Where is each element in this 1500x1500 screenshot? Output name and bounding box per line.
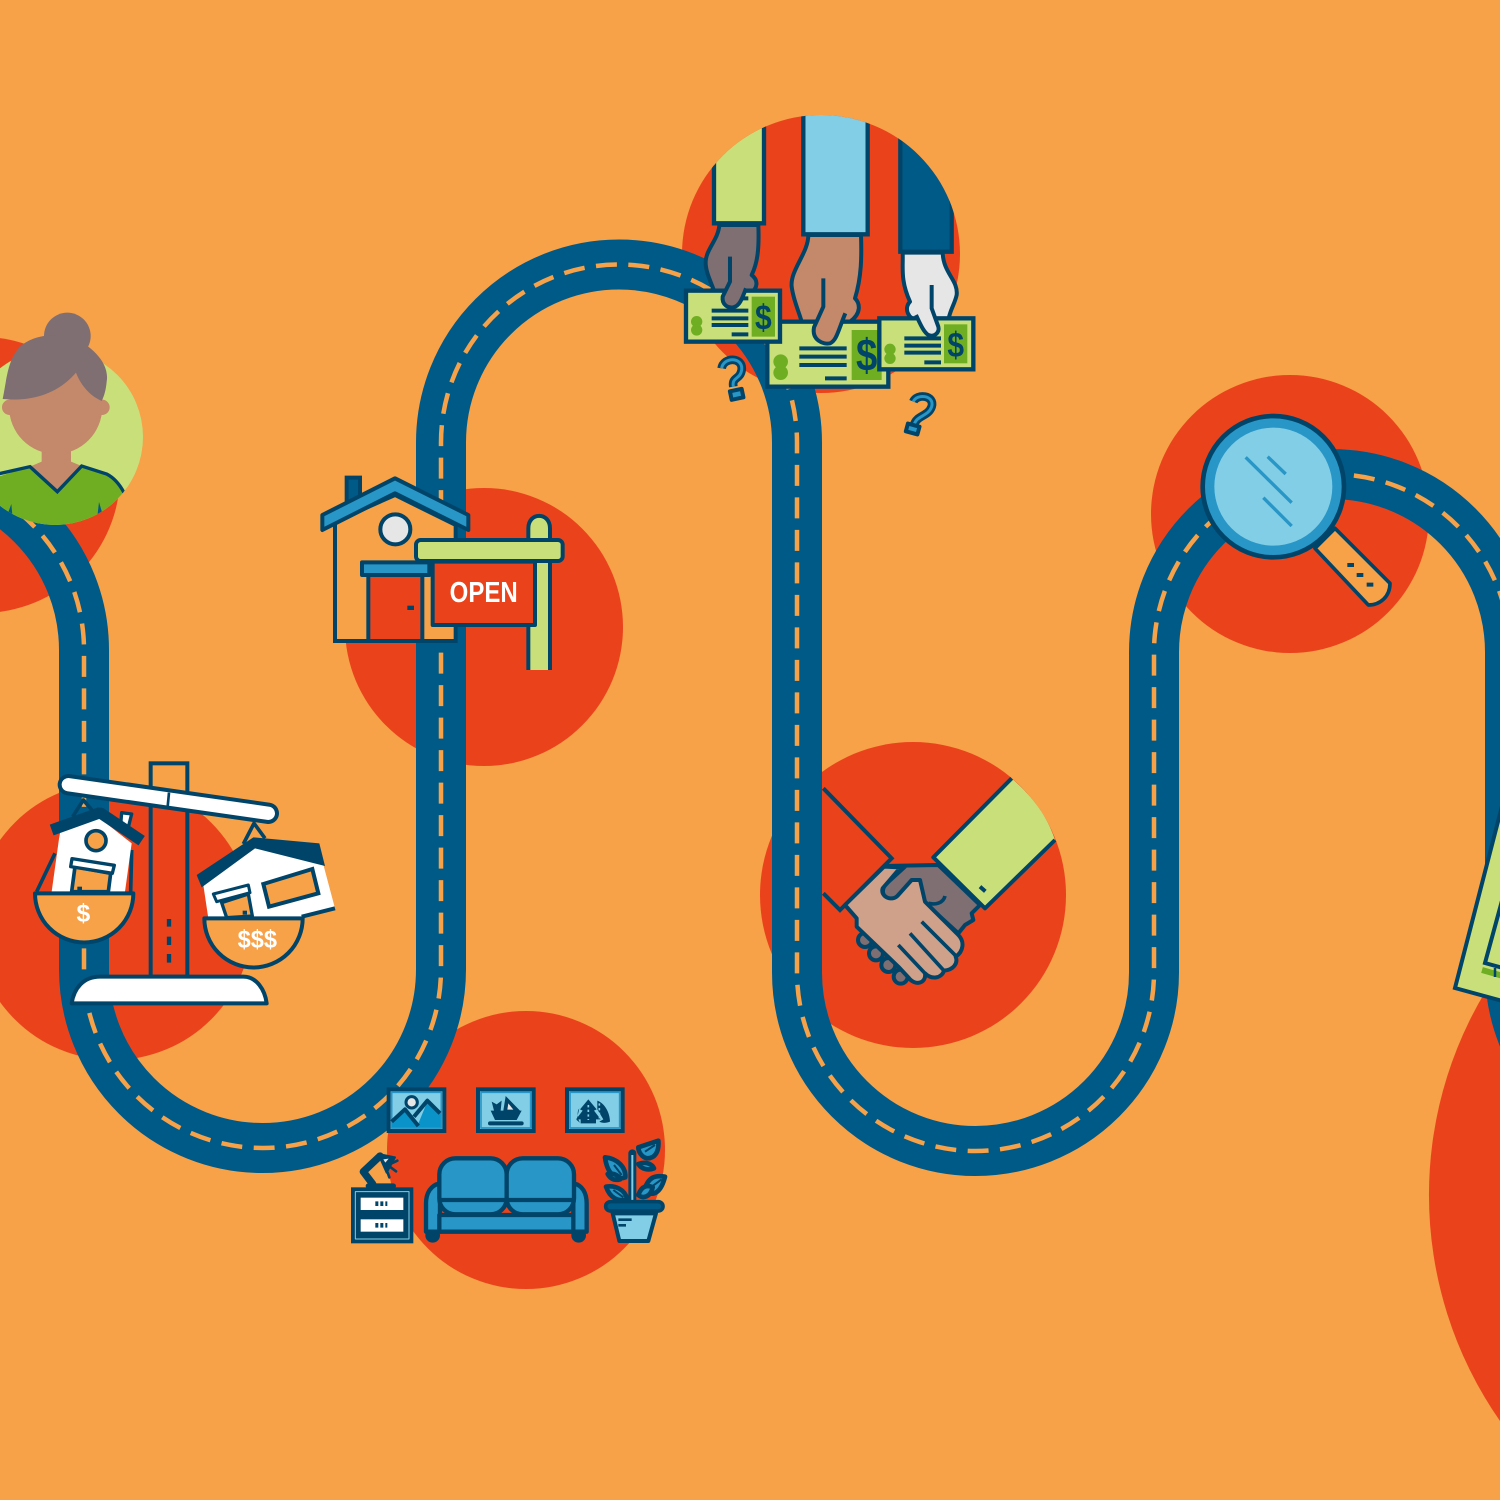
scale post bbox=[151, 763, 187, 977]
sleeves bbox=[714, 107, 952, 252]
roof bbox=[322, 478, 468, 530]
picture: mountains bbox=[389, 1089, 444, 1131]
cheap pan: $ bbox=[76, 901, 90, 928]
gray hand bbox=[883, 865, 980, 933]
scale beam bbox=[68, 785, 268, 813]
middle cheque: $ bbox=[856, 330, 877, 381]
peach hand bbox=[845, 867, 962, 983]
left hanger bbox=[37, 800, 132, 892]
sofa bbox=[425, 1158, 587, 1243]
finger lines bbox=[898, 896, 957, 973]
question mark right bbox=[906, 396, 932, 434]
handle bbox=[1315, 528, 1390, 605]
expensive pan bbox=[204, 918, 303, 967]
potted plant bbox=[605, 1141, 665, 1241]
open sign plate bbox=[433, 562, 535, 625]
nightstand bbox=[353, 1189, 412, 1242]
house body bbox=[335, 495, 456, 641]
door bbox=[368, 575, 422, 641]
left sleeve bbox=[823, 788, 892, 910]
left cheque: $ bbox=[755, 298, 772, 337]
right hanger bbox=[243, 823, 265, 844]
expensive pan: $$$ bbox=[238, 926, 277, 953]
lamp bbox=[363, 1154, 397, 1186]
brown hand bbox=[792, 235, 861, 322]
gray hand bbox=[706, 225, 759, 293]
gray fingers behind bbox=[858, 933, 908, 984]
winding road bbox=[0, 264, 1500, 1151]
large house bbox=[197, 837, 335, 918]
right sleeve bbox=[933, 778, 1055, 908]
left cheque bbox=[686, 291, 780, 342]
open sign plate: OPEN bbox=[450, 577, 518, 609]
picture: sailboat bbox=[478, 1089, 534, 1131]
right cheque bbox=[879, 318, 973, 369]
lens bbox=[1203, 416, 1344, 557]
icon: woman portrait bbox=[0, 313, 143, 540]
picture: trees bbox=[567, 1089, 623, 1131]
door awning bbox=[362, 562, 429, 575]
icon: handshake bbox=[823, 778, 1055, 984]
scale base bbox=[72, 977, 267, 1003]
sign post bbox=[528, 516, 550, 670]
chimney bbox=[347, 478, 360, 508]
round window bbox=[380, 514, 410, 544]
question mark left bbox=[722, 360, 743, 400]
icon: partial document at right edge bbox=[1455, 775, 1500, 1003]
small house bbox=[52, 813, 142, 892]
sign board bbox=[416, 540, 563, 561]
middle cheque bbox=[767, 322, 888, 387]
icon: living room furniture bbox=[353, 1089, 665, 1243]
right cheque: $ bbox=[947, 326, 964, 365]
white hand bbox=[903, 253, 957, 320]
icon: magnifying glass bbox=[1203, 416, 1390, 605]
cheap pan bbox=[35, 893, 133, 942]
fingers bbox=[723, 257, 939, 344]
icon: hands holding cheques with question marks bbox=[686, 107, 973, 434]
icon: house with open sign bbox=[322, 478, 563, 670]
icon: balance scale comparing house prices bbox=[35, 763, 335, 1003]
